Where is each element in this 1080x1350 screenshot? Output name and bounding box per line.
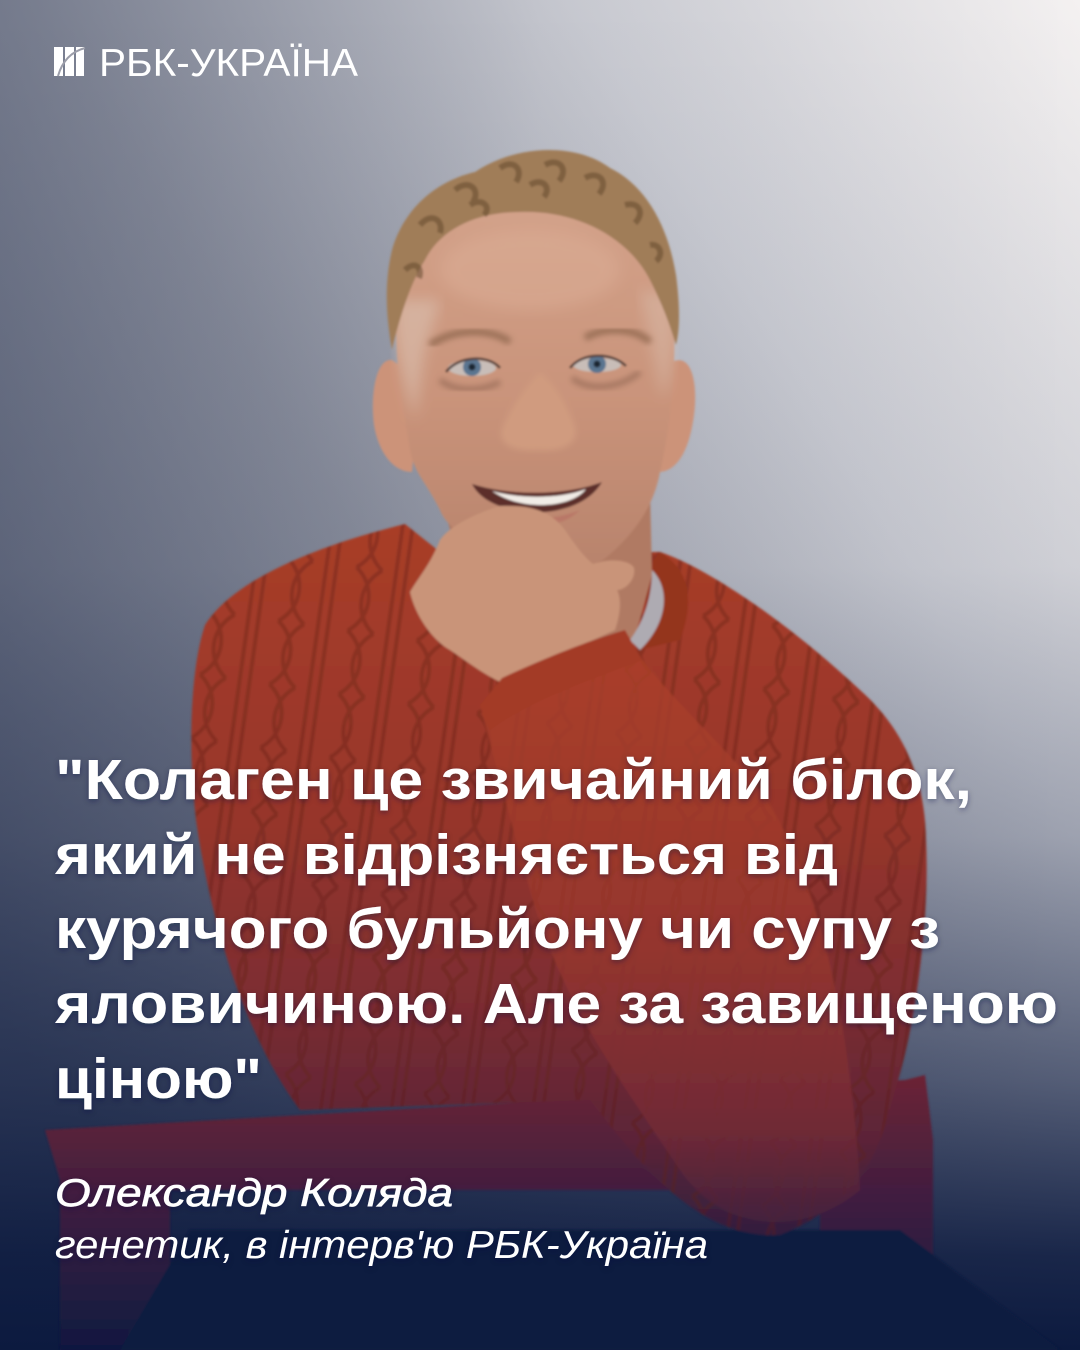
quote: ціною" <box>55 1047 262 1111</box>
sleeve <box>480 632 860 1222</box>
collar <box>640 552 688 650</box>
cuff <box>480 630 642 730</box>
brows <box>430 330 650 345</box>
fist <box>410 506 634 682</box>
author role: генетик, в інтерв'ю РБК-Україна <box>55 1224 708 1267</box>
teeth <box>492 489 586 505</box>
attribution <box>55 1172 708 1267</box>
eyes <box>440 355 640 389</box>
quote: який не відрізняється від <box>54 823 838 887</box>
quote: яловичиною. Але за завищеною <box>54 972 1058 1036</box>
logo: РБК-Україна <box>54 42 358 85</box>
quote: "Колаген це звичайний білок, <box>55 748 972 812</box>
neck <box>440 490 652 650</box>
sweater body <box>191 524 927 1235</box>
forehead light <box>440 230 620 310</box>
curls <box>405 162 660 278</box>
author name: Олександр Коляда <box>55 1172 453 1215</box>
undershirt <box>630 570 664 650</box>
left ear <box>373 360 420 472</box>
quote: курячого бульйону чи супу з <box>55 897 940 961</box>
temple highlights <box>395 300 440 420</box>
quote <box>54 748 1058 1111</box>
chair <box>45 1075 933 1350</box>
sweater cable knit <box>191 524 927 1235</box>
face <box>396 205 674 569</box>
logo mark <box>54 47 85 76</box>
hair <box>387 150 679 350</box>
smile <box>472 482 602 512</box>
logo wordmark: РБК-УКРАЇНА <box>99 42 358 85</box>
lower lip <box>500 510 580 525</box>
right ear <box>655 360 695 472</box>
nose <box>501 372 576 450</box>
trousers <box>120 1230 1060 1350</box>
